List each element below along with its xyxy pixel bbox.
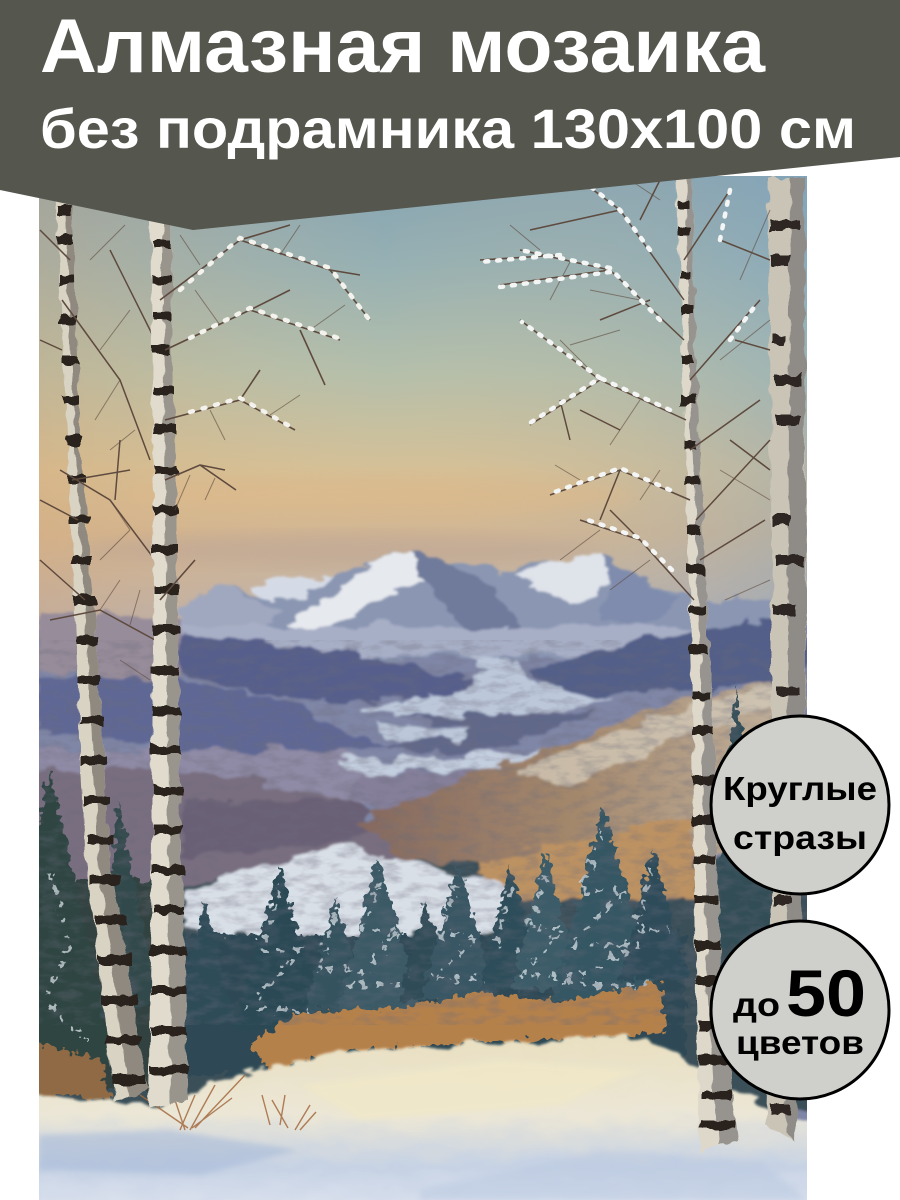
header banner	[0, 0, 900, 230]
badge: round rhinestones	[711, 716, 889, 894]
snow foreground	[20, 1036, 820, 1200]
badge: up to 50 colors: до	[733, 986, 780, 1023]
landscape base	[39, 549, 807, 1122]
painting: winter mountain landscape	[20, 176, 820, 1200]
branches	[40, 230, 155, 640]
birch tree left inner	[148, 218, 370, 1108]
subtitle: без подрамника 130х100 см	[40, 97, 856, 160]
badge: round rhinestones: стразы	[733, 819, 867, 856]
dark blue forest hills	[180, 636, 484, 704]
branches	[160, 225, 370, 600]
birch tree left outer	[40, 198, 155, 1102]
spruce forest	[20, 685, 775, 1090]
badge: up to 50 colors	[711, 921, 889, 1099]
russet mid hills	[20, 770, 400, 900]
autumn grass band	[30, 982, 665, 1100]
frozen river	[360, 655, 610, 716]
badge: up to 50 colors: 50	[786, 956, 866, 1030]
mountains	[233, 557, 771, 663]
dry foreground bushes	[140, 1075, 316, 1130]
mist	[39, 626, 807, 656]
far birch tree right	[766, 178, 806, 1140]
branches	[480, 180, 770, 600]
sky	[39, 176, 807, 666]
birch tree right	[480, 178, 770, 1152]
badge: up to 50 colors: цветов	[736, 1024, 864, 1061]
title: Алмазная мозаика	[40, 4, 766, 89]
painted texture overlay	[39, 640, 807, 1025]
badge: round rhinestones: Круглые	[723, 770, 877, 807]
snow meadow	[185, 842, 520, 940]
